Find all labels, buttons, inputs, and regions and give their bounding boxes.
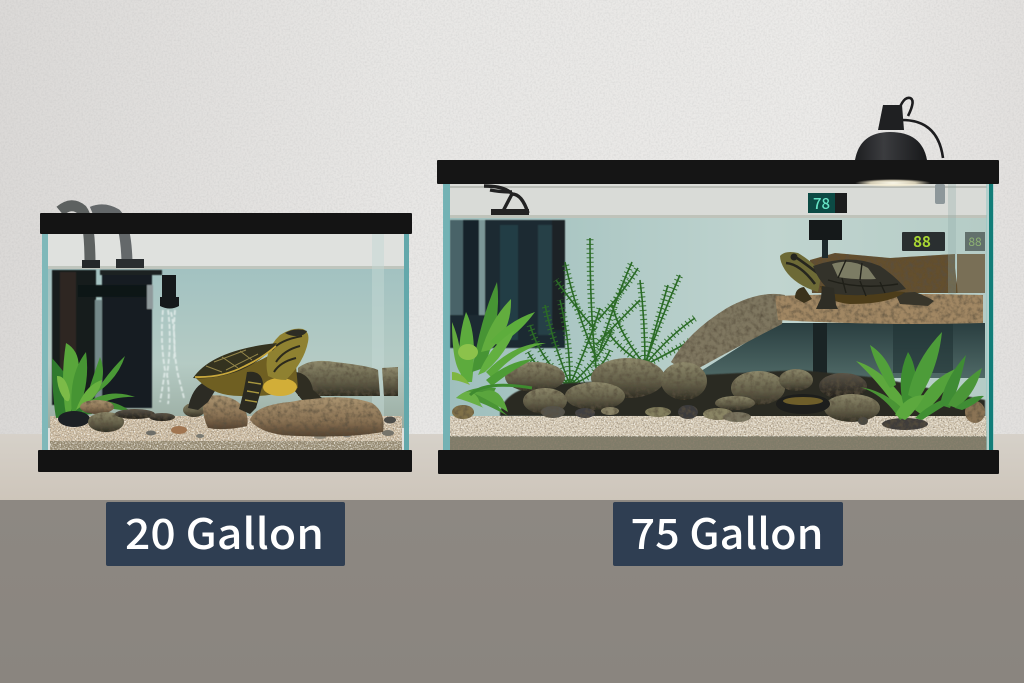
right support shade bbox=[893, 323, 953, 373]
digital thermometer: 88 bbox=[913, 231, 931, 252]
icon: broad-leaf plant bbox=[52, 343, 135, 418]
metal cylinder bbox=[935, 184, 945, 204]
water bbox=[450, 218, 987, 423]
reflected thermometer: 88 bbox=[968, 233, 982, 250]
front leg bbox=[816, 286, 838, 309]
neck and head bbox=[266, 329, 308, 380]
front leg bbox=[239, 372, 263, 414]
lamp arm and hook bbox=[896, 98, 943, 158]
icon: dark dish bbox=[58, 411, 90, 427]
water temperature display bbox=[808, 193, 847, 258]
lamp dome bbox=[855, 132, 927, 160]
front glass edges bbox=[443, 184, 994, 450]
lid bbox=[40, 213, 412, 234]
water line bbox=[450, 215, 987, 218]
basking platform bbox=[775, 294, 983, 324]
support post bbox=[813, 323, 827, 379]
front glass edges bbox=[42, 234, 409, 450]
right back rock bbox=[957, 254, 985, 293]
broad-leaf plant left bbox=[452, 282, 546, 416]
glass corner reflection bbox=[948, 184, 956, 294]
icon: heat lamp bbox=[855, 98, 943, 160]
substrate gravel bbox=[50, 416, 402, 450]
back front leg bbox=[795, 287, 812, 303]
tank: 75 gallon bbox=[437, 98, 999, 474]
fern foliage needles bbox=[528, 238, 697, 385]
glass and air gap bbox=[42, 234, 409, 450]
base bbox=[438, 450, 999, 474]
falling water bbox=[160, 310, 184, 404]
lamp neck bbox=[878, 105, 904, 130]
filter unit bbox=[450, 220, 565, 348]
icon: dark dish bbox=[776, 394, 830, 414]
back glass corner bbox=[372, 234, 384, 429]
right fern plants bbox=[856, 332, 984, 420]
body bbox=[820, 286, 905, 304]
shelf bbox=[0, 434, 1024, 683]
water line bbox=[48, 266, 404, 269]
icon: filter spout bbox=[160, 275, 179, 308]
neck and head bbox=[780, 252, 822, 292]
rear leg and tail bbox=[895, 292, 934, 306]
basking ramp bbox=[671, 294, 983, 374]
lid bbox=[437, 160, 999, 184]
filter unit bbox=[52, 270, 162, 408]
shade under basking platform bbox=[690, 323, 985, 378]
icon: hose pipes bbox=[60, 206, 144, 268]
large foreground rocks bbox=[203, 395, 384, 436]
display bracket bbox=[809, 220, 842, 240]
rear rock row bbox=[505, 358, 867, 414]
back rocks bbox=[298, 361, 398, 396]
background wall bbox=[0, 0, 1024, 436]
fern stems bbox=[528, 238, 697, 385]
base bbox=[38, 450, 412, 472]
digital thermometer bbox=[902, 231, 945, 252]
sand substrate bbox=[450, 416, 987, 450]
small rocks left bbox=[80, 400, 205, 432]
turtle legs bbox=[188, 382, 218, 410]
shell bbox=[193, 343, 277, 378]
plastron bbox=[263, 378, 297, 396]
water bbox=[48, 268, 404, 428]
body bbox=[195, 354, 298, 396]
tank: 20 gallon bbox=[38, 206, 412, 472]
turtle, 20 gallon tank bbox=[188, 329, 322, 414]
turtle, 75 gallon tank bbox=[780, 252, 934, 309]
glass and air gap bbox=[444, 184, 993, 450]
top reflection line bbox=[450, 186, 987, 188]
shelf top surface bbox=[0, 434, 1024, 501]
label: 75 gallon: 75 Gallon bbox=[630, 501, 824, 562]
icon: pump above water bbox=[484, 186, 529, 215]
label: 20 gallon: 20 Gallon bbox=[125, 501, 324, 562]
shelf front face bbox=[0, 500, 1024, 683]
upper back rock bbox=[810, 253, 958, 293]
fine fern plants bbox=[528, 238, 697, 385]
lamp glow bbox=[855, 179, 931, 187]
water temperature display: 78 bbox=[813, 193, 830, 214]
shell bbox=[813, 260, 906, 295]
front pebbles bbox=[452, 394, 985, 430]
dark rock bed bbox=[500, 370, 985, 418]
reflected thermometer bbox=[965, 232, 985, 251]
